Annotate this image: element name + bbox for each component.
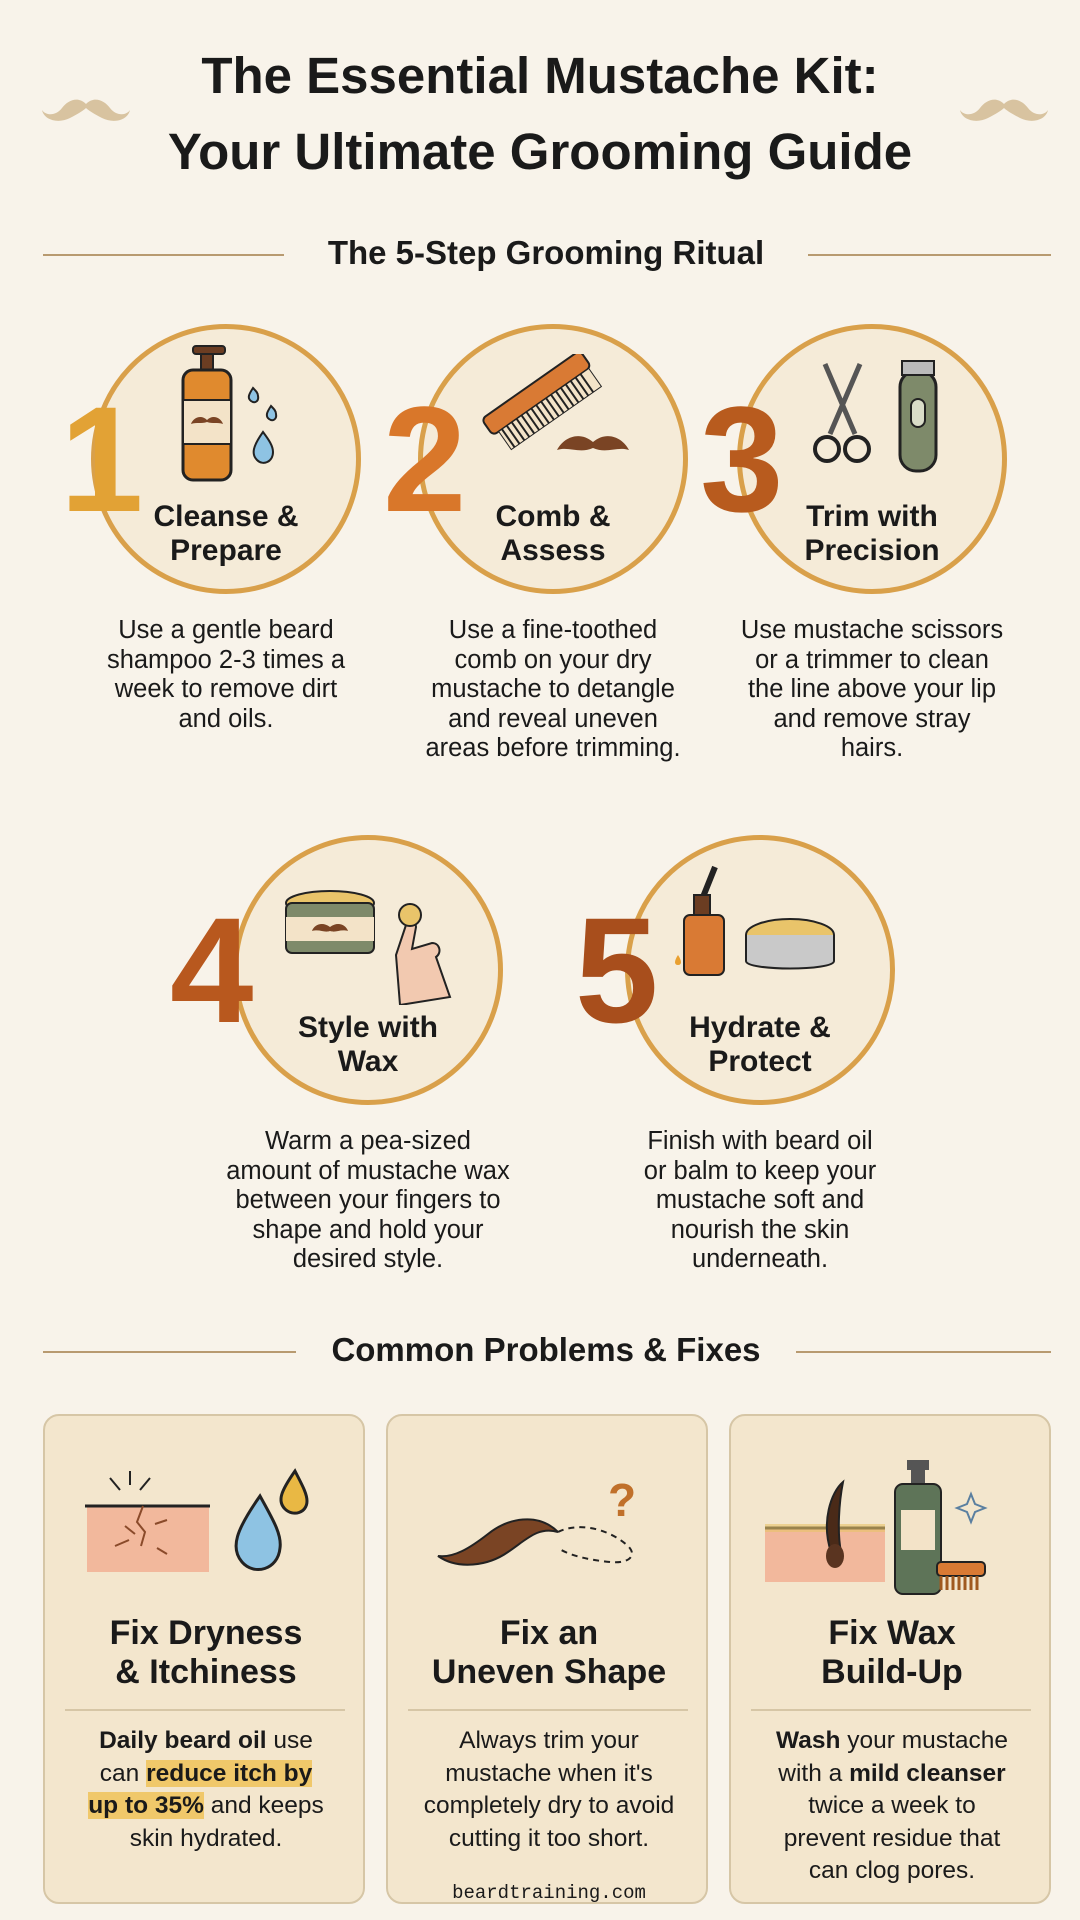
label 3 — [804, 500, 940, 567]
title: dryness — [110, 1614, 302, 1691]
description 2: mustache to detangle — [431, 675, 675, 703]
label 2: Assess — [500, 534, 606, 567]
title: wax: Fix Wax — [828, 1614, 956, 1652]
step 3 — [700, 324, 1007, 762]
step 1 — [60, 324, 361, 732]
description 4: amount of mustache wax — [226, 1156, 510, 1184]
description 5: Finish with beard oil — [647, 1127, 873, 1155]
description 1: Use a gentle beard — [118, 616, 334, 644]
footer url: beardtraining.com — [452, 1882, 646, 1904]
label 5: Hydrate & — [689, 1011, 831, 1044]
label 1: Prepare — [170, 534, 282, 567]
description 4 — [226, 1127, 510, 1273]
description 2: and reveal uneven — [448, 704, 658, 732]
description 5 — [644, 1127, 876, 1273]
body: dryness: can reduce itch by — [100, 1760, 312, 1786]
circle 4 — [233, 835, 503, 1105]
icon: half mustache with question — [438, 1474, 636, 1566]
description 5: underneath. — [692, 1245, 828, 1273]
body: uneven: completely dry to avoid — [424, 1792, 674, 1819]
heading: 5-step ritual: The 5-Step Grooming Ritual — [328, 234, 764, 271]
body: uneven: cutting it too short. — [449, 1824, 649, 1852]
title: uneven — [432, 1614, 666, 1691]
description 4: between your fingers to — [235, 1186, 501, 1214]
icon: cracked skin and drops — [85, 1468, 308, 1572]
title: uneven: Fix an — [500, 1614, 598, 1652]
description 1: shampoo 2-3 times a — [107, 646, 345, 674]
label 4: Wax — [338, 1045, 398, 1078]
icon: half mustache with question: ? — [608, 1474, 636, 1526]
heading: common problems: Common Problems & Fixes — [331, 1331, 761, 1368]
icon: scissors and trimmer — [813, 360, 938, 472]
icon: wax tin and hand — [285, 890, 452, 1005]
title — [168, 47, 912, 180]
card: dryness — [43, 1414, 365, 1904]
label 3: Trim with — [806, 500, 938, 533]
description 3: Use mustache scissors — [741, 616, 1003, 644]
step 2 — [383, 324, 688, 762]
title: Your Ultimate Grooming Guide — [168, 123, 912, 180]
description 5: or balm to keep your — [644, 1156, 876, 1184]
description 2 — [425, 616, 681, 762]
body: wax: can clog pores. — [809, 1857, 975, 1884]
label 4: Style with — [298, 1011, 438, 1044]
number 1: 1 — [60, 375, 143, 543]
title: dryness: & Itchiness — [115, 1653, 297, 1691]
label 1: Cleanse & — [153, 500, 299, 533]
title: The Essential Mustache Kit: — [201, 47, 879, 104]
step 5 — [575, 835, 895, 1273]
description 3: hairs. — [841, 734, 903, 762]
card: wax build-up — [729, 1414, 1051, 1904]
title: wax: Build-Up — [821, 1653, 963, 1691]
number 4: 4 — [170, 886, 253, 1054]
title: uneven: Uneven Shape — [432, 1653, 666, 1691]
description 3: the line above your lip — [748, 675, 996, 703]
circle 2 — [418, 324, 688, 594]
step 4 — [170, 835, 510, 1273]
body: dryness: up to 35% and keeps — [88, 1792, 324, 1819]
card: uneven shape — [386, 1414, 708, 1904]
number 2: 2 — [383, 375, 466, 543]
number 5: 5 — [575, 886, 658, 1054]
icon: mustache left — [42, 100, 130, 121]
description 3: and remove stray — [773, 704, 970, 732]
number 3: 3 — [700, 375, 783, 543]
circle 5 — [625, 835, 895, 1105]
title: wax — [821, 1614, 963, 1691]
description 5: mustache soft and — [656, 1186, 864, 1214]
icon: shampoo bottle — [182, 345, 278, 482]
label 1 — [153, 500, 299, 567]
body: uneven: mustache when it's — [445, 1760, 653, 1786]
label 4 — [298, 1011, 438, 1078]
body: dryness — [88, 1727, 324, 1852]
body: dryness: skin hydrated. — [130, 1824, 282, 1852]
label 5 — [689, 1011, 831, 1078]
label 2 — [496, 500, 610, 567]
description 2: areas before trimming. — [425, 734, 681, 762]
description 1: and oils. — [178, 704, 273, 732]
body: wax: prevent residue that — [784, 1824, 1000, 1852]
label 5: Protect — [708, 1045, 812, 1078]
body: wax — [776, 1727, 1008, 1884]
description 4: desired style. — [293, 1245, 443, 1273]
label 3: Precision — [804, 534, 940, 567]
description 1: week to remove dirt — [115, 675, 337, 703]
description 4: shape and hold your — [252, 1216, 484, 1244]
description 4: Warm a pea-sized — [265, 1127, 471, 1155]
description 2: comb on your dry — [454, 646, 652, 674]
description 3 — [741, 616, 1003, 762]
icon: dropper bottle and balm — [675, 866, 835, 976]
body: dryness: Daily beard oil use — [99, 1727, 313, 1754]
description 2: Use a fine-toothed — [449, 616, 657, 644]
body: wax: with a mild cleanser — [778, 1760, 1006, 1786]
label 2: Comb & — [496, 500, 610, 533]
circle 1 — [91, 324, 361, 594]
icon: comb and mustache — [482, 354, 629, 450]
title: dryness: Fix Dryness — [110, 1614, 302, 1652]
body: wax: Wash your mustache — [776, 1727, 1008, 1754]
circle 3 — [737, 324, 1007, 594]
body: uneven: Always trim your — [459, 1727, 639, 1754]
body: uneven — [424, 1727, 674, 1852]
icon: follicle and cleanser — [765, 1460, 988, 1595]
description 3: or a trimmer to clean — [755, 646, 989, 674]
icon: mustache right — [960, 100, 1048, 121]
body: wax: twice a week to — [808, 1792, 976, 1819]
description 1 — [107, 616, 346, 732]
description 5: nourish the skin — [671, 1216, 849, 1244]
